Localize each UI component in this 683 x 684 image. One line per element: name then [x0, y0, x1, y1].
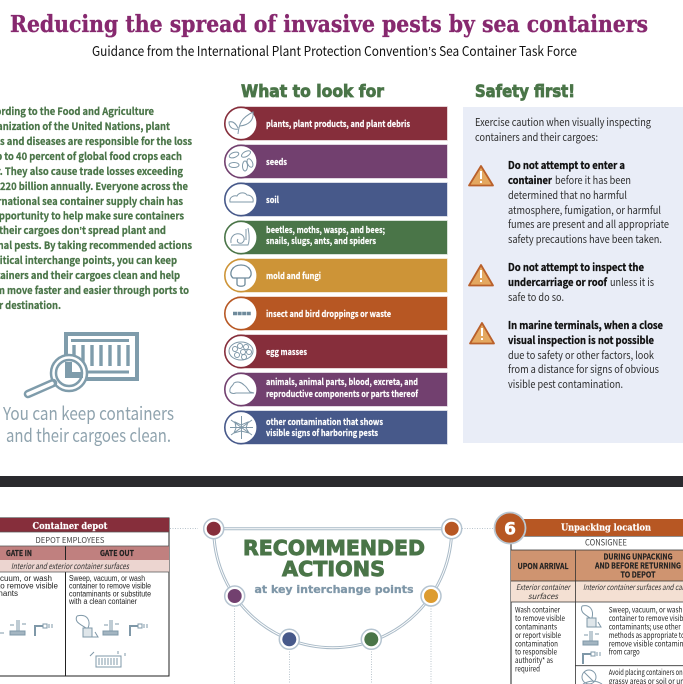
safety item 2: unless it is [610, 274, 654, 289]
item: insects: snails, slugs, ants, and spiders [266, 234, 376, 247]
item: other contamination: other contamination that shows [266, 415, 383, 428]
step number badge [494, 512, 526, 544]
during unpacking text: from cargo [609, 646, 640, 658]
step number badge: 6 [504, 520, 516, 540]
gate out text: container to remove visible [69, 582, 151, 590]
item: insects: beetles, moths, wasps, and bees; [266, 223, 385, 236]
safety item 3: visible pest contamination. [508, 376, 623, 391]
item: egg masses: egg masses [266, 345, 307, 358]
upon arrival text: to remove visible [515, 613, 565, 624]
safety item 3: visual inspection is not possible [508, 332, 654, 347]
dotted drop lines [234, 606, 431, 684]
upon arrival text [515, 604, 565, 674]
safety item 3: In marine terminals, when a close [508, 317, 663, 332]
safety item 1: container [508, 172, 552, 187]
panel: container depot table [0, 518, 169, 676]
unpacking header [510, 519, 683, 536]
item: animals [225, 373, 447, 406]
item: seeds [225, 145, 447, 178]
safety item 1: safety precautions have been taken. [508, 231, 662, 246]
safety item 1: atmosphere, fumigation, or harmful [508, 202, 661, 217]
upon arrival text: to responsible [515, 646, 557, 658]
icon: no grass placement [582, 670, 602, 684]
icons: cleaning tools gate in [0, 620, 52, 636]
caption: you can keep containers clean: and their cargoes clean. [6, 422, 171, 448]
gate headers: GATE OUT [100, 548, 134, 559]
safety item 1: determined that no harmful [508, 187, 627, 202]
item: droppings [225, 297, 447, 330]
icons: cleaning tools [581, 606, 601, 664]
upon arrival text: Wash container [515, 604, 560, 616]
node: green [361, 629, 381, 649]
item: egg masses [225, 335, 447, 368]
node: blue [279, 629, 299, 649]
heading: recommended actions [243, 536, 425, 581]
during unpacking text [609, 604, 683, 684]
icon: magnifier over container [28, 334, 137, 394]
item: droppings: insect and bird droppings or waste [266, 307, 391, 320]
depot header [0, 518, 169, 532]
subheading: at key interchange points: at key interchange points [254, 584, 414, 596]
safety item 1: Do not attempt to enter a [508, 157, 625, 172]
column headers: TO DEPOT [620, 570, 656, 580]
panel: safety first [463, 107, 683, 443]
subtitle: Guidance from the International Plant Protection Convention’s Sea Container Task Force [92, 41, 577, 60]
gate out text: Sweep, vacuum, or wash [69, 574, 145, 583]
upon arrival text: or report visible [515, 630, 561, 641]
heading: recommended actions: ACTIONS [282, 557, 385, 581]
surfaces row: surfaces [528, 591, 559, 602]
safety item 1 [508, 157, 669, 246]
icon: warning triangle 2 [469, 265, 493, 286]
node: gold [421, 586, 441, 606]
column headers: UPON ARRIVAL [518, 561, 569, 572]
surfaces row: Exterior container [516, 582, 572, 593]
heading: safety first: Safety first! [475, 82, 575, 101]
depot header: Container depot [32, 521, 108, 532]
dotted connectors [170, 528, 495, 530]
icon: clean container [90, 651, 125, 667]
item: mold [225, 259, 447, 292]
consignee row: CONSIGNEE [585, 537, 627, 549]
safety item 1: before it has been [555, 172, 631, 187]
panel: unpacking location table [494, 512, 683, 684]
item: soil: soil [266, 193, 279, 206]
upon arrival text: required [515, 664, 540, 674]
safety item 3: due to safety or other factors, look [508, 347, 654, 362]
gate out text [68, 574, 151, 606]
node: purple [225, 586, 245, 606]
item: seeds: seeds [266, 155, 287, 168]
upon arrival text: contaminants [515, 622, 557, 632]
diagram: recommended actions arc [204, 519, 462, 649]
gate headers [0, 546, 169, 676]
depot employees row: DEPOT EMPLOYEES [36, 535, 105, 546]
safety item 3: from a distance for signs of obvious [508, 361, 659, 376]
upon arrival text: authority* as [515, 655, 553, 666]
upon arrival text: contamination [515, 638, 558, 650]
gate in text [0, 574, 59, 598]
item: soil [225, 183, 447, 216]
gate out text: with a clean container [68, 597, 137, 606]
safety intro text: Exercise caution when visually inspecting [475, 114, 651, 129]
item: plants: plants, plant products, and plant debris [266, 117, 410, 130]
caption: you can keep containers clean [2, 400, 174, 448]
safety item 2 [508, 259, 654, 304]
heading: recommended actions: RECOMMENDED [243, 536, 425, 560]
safety intro text: containers and their cargoes: [475, 129, 598, 144]
gate out text: contaminants or substitute [69, 590, 151, 598]
caption: you can keep containers clean: You can keep containers [2, 400, 174, 426]
icon: warning triangle 1 [469, 166, 493, 186]
item: mold: mold and fungi [266, 269, 321, 282]
icons: cleaning tools gate out [76, 615, 147, 637]
column headers [511, 550, 683, 581]
item: other contamination: visible signs of harboring pests [266, 426, 378, 439]
item: animals: animals, animal parts, blood, excreta, and [266, 375, 418, 388]
item: animals: reproductive components or parts thereof [266, 387, 419, 400]
node: depot maroon [204, 519, 224, 539]
item: plants [225, 107, 447, 140]
gate headers: GATE IN [6, 548, 32, 559]
panel: what to look for list [225, 107, 447, 444]
unpacking header: Unpacking location [561, 522, 651, 534]
item: insects [225, 221, 447, 254]
safety intro text [475, 114, 651, 144]
safety item 2: Do not attempt to inspect the [508, 259, 644, 274]
icon: warning triangle 3 [470, 323, 494, 344]
item: other contamination [225, 411, 447, 444]
safety item 2: safe to do so. [508, 289, 564, 304]
surfaces row: Interior and exterior container surfaces [11, 561, 130, 572]
safety item 2: undercarriage or roof [508, 274, 608, 289]
heading: what to look for: What to look for [241, 82, 385, 101]
safety item 3 [508, 317, 663, 391]
surfaces row [511, 581, 683, 602]
node: orange [442, 519, 462, 539]
intro text block [0, 104, 192, 312]
column headers: DURING UNPACKING [604, 552, 673, 562]
